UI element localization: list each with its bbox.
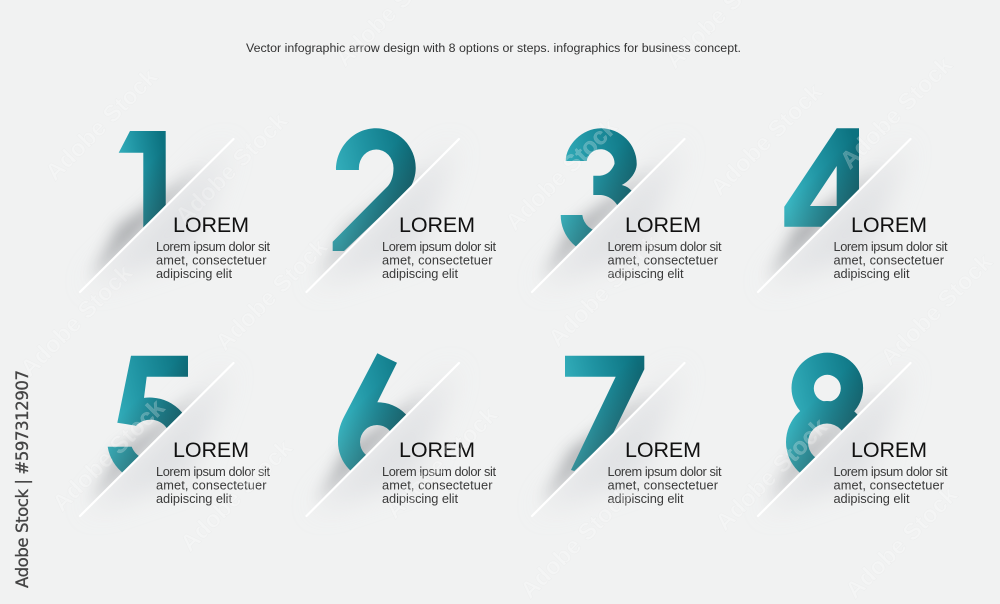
body text 2: [382, 239, 496, 281]
stock id vertical label: Adobe Stock | #597312907: [13, 370, 32, 588]
body text 4: Lorem ipsum dolor sit: [834, 239, 948, 254]
heading 7: LOREM: [625, 438, 701, 462]
heading 1: LOREM: [173, 213, 249, 237]
watermark pattern: Adobe Stock: [515, 481, 638, 604]
shadow 1: [92, 172, 196, 275]
watermark pattern: Adobe Stock: [40, 63, 163, 186]
body text 6: amet, consectetuer: [382, 478, 493, 492]
body text 2: amet, consectetuer: [382, 252, 493, 268]
divider line 2: [306, 139, 459, 292]
body text 7: amet, consectetuer: [608, 478, 719, 492]
panel: step 4: [758, 128, 948, 292]
watermark pattern: Adobe Stock: [47, 394, 170, 517]
heading 8: LOREM: [851, 438, 927, 462]
panel: step 3: [532, 128, 722, 292]
body text 2: adipiscing elit: [382, 266, 458, 281]
body text 7: [608, 464, 722, 506]
watermark pattern: Adobe Stock: [170, 107, 293, 230]
body text 6: [382, 464, 496, 506]
divider line 1: [80, 139, 234, 292]
number 3: [560, 128, 637, 246]
shadow 3: [544, 174, 646, 274]
body text 8: Lorem ipsum dolor sit: [834, 464, 948, 479]
divider line 4: [758, 139, 910, 292]
body text 5: Lorem ipsum dolor sit: [156, 464, 270, 479]
number 8: [786, 352, 864, 472]
body text 6: adipiscing elit: [382, 491, 458, 506]
body text 6: Lorem ipsum dolor sit: [382, 464, 496, 479]
watermark pattern: Adobe Stock: [543, 229, 666, 352]
divider line 3: [532, 139, 684, 292]
shadow 8: [772, 400, 870, 497]
number 4: [784, 128, 859, 227]
panel: step 5: [80, 356, 270, 516]
body text 1: Lorem ipsum dolor sit: [156, 239, 270, 254]
number 6: [338, 353, 406, 470]
body text 4: [834, 239, 948, 281]
heading 4: LOREM: [851, 213, 927, 237]
heading 6: LOREM: [399, 438, 475, 462]
number 1: [119, 131, 166, 232]
panel: step 6: [306, 353, 496, 516]
watermark pattern: Adobe Stock: [705, 78, 828, 201]
number 2: [333, 128, 416, 251]
shadow 7: [544, 397, 647, 499]
body text 3: Lorem ipsum dolor sit: [608, 239, 722, 254]
body text 8: [834, 464, 948, 506]
number 7: [565, 356, 644, 471]
title: Vector infographic arrow design with 8 options or steps. infographics for business concept.: [246, 41, 741, 55]
shadow 6: [319, 397, 422, 499]
body text 7: adipiscing elit: [608, 491, 684, 506]
watermark pattern: Adobe Stock: [500, 113, 623, 236]
watermark pattern: Adobe Stock: [875, 248, 998, 371]
shadow 5: [94, 399, 194, 498]
divider line 6: [306, 363, 459, 516]
watermark pattern: Adobe Stock: [710, 413, 833, 536]
body text 1: [156, 239, 270, 281]
watermark pattern: Adobe Stock: [15, 259, 138, 382]
watermark pattern: Adobe Stock: [175, 434, 298, 557]
heading 2: LOREM: [399, 213, 475, 237]
divider line 5: [80, 363, 234, 516]
body text 8: amet, consectetuer: [834, 478, 945, 492]
divider line 7: [532, 363, 684, 516]
divider line 8: [758, 363, 910, 516]
body text 8: adipiscing elit: [834, 491, 910, 506]
heading 5: LOREM: [173, 438, 249, 462]
body text 7: Lorem ipsum dolor sit: [608, 464, 722, 479]
panel: step 7: [532, 356, 722, 516]
body text 2: Lorem ipsum dolor sit: [382, 239, 496, 254]
body text 4: adipiscing elit: [834, 266, 910, 281]
body text 5: amet, consectetuer: [156, 478, 267, 492]
watermark pattern: Adobe Stock: [840, 481, 963, 604]
body text 3: adipiscing elit: [608, 266, 684, 281]
shadow 4: [770, 172, 873, 275]
body text 4: amet, consectetuer: [834, 252, 945, 268]
watermark pattern: Adobe Stock: [380, 401, 503, 524]
panel: step 2: [306, 128, 496, 292]
watermark pattern: Adobe Stock: [835, 51, 958, 174]
body text 3: amet, consectetuer: [608, 252, 719, 268]
panel: step 8: [758, 353, 948, 516]
body text 5: [156, 464, 270, 506]
shadow 2: [323, 180, 415, 270]
panel: step 1: [80, 131, 270, 292]
body text 5: adipiscing elit: [156, 491, 232, 506]
body text 1: adipiscing elit: [156, 266, 232, 281]
number 5: [108, 356, 188, 472]
body text 3: [608, 239, 722, 281]
body text 1: amet, consectetuer: [156, 252, 267, 268]
heading 3: LOREM: [625, 213, 701, 237]
watermark pattern: Adobe Stock: [210, 233, 333, 356]
